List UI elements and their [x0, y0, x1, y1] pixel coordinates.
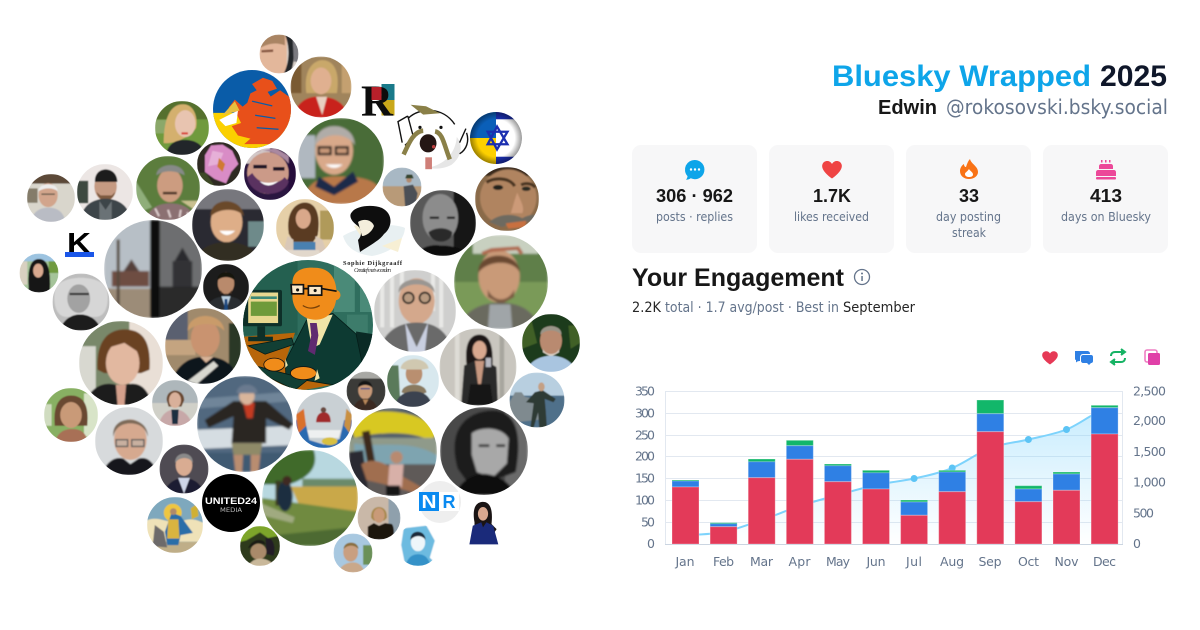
- month labels: May: [826, 554, 851, 569]
- avatar: United24 Media logo: [202, 474, 260, 532]
- avatar: man under blue sky: [334, 534, 372, 572]
- avatar: NR logo: N: [422, 492, 436, 512]
- right axis labels: [1133, 384, 1166, 551]
- avatar: smiling woman in red: [290, 56, 352, 118]
- avatar: man among green leaves: [240, 526, 280, 566]
- avatar: cap man: [136, 156, 200, 220]
- avatar: knight with wolf: [147, 497, 203, 553]
- bar: March: [748, 459, 775, 544]
- avatar: painted historic portrait: [475, 167, 539, 231]
- line markers: [872, 426, 1070, 488]
- avatar: woman in pink coat: [152, 380, 198, 426]
- left axis labels: 300: [635, 406, 655, 420]
- right axis labels: 1,000: [1133, 474, 1166, 490]
- logo: R with color blocks: R: [361, 76, 394, 126]
- month labels: Feb: [713, 554, 734, 569]
- icon: heart: [822, 161, 842, 178]
- bar: December: [1091, 405, 1118, 544]
- chart legend: [1042, 349, 1160, 365]
- bar: January: [672, 480, 699, 544]
- avatar: old man with books: [27, 174, 75, 222]
- avatar: fisheye rafting: [296, 392, 352, 448]
- avatar: United24 Media logo: MEDIA: [220, 506, 243, 514]
- left axis labels: 350: [635, 384, 655, 398]
- avatar: woman in black top: [358, 496, 400, 540]
- avatar: Sophie Dijkgraaff logo: Creatief met woorden: [354, 267, 391, 274]
- right axis labels: 1,500: [1133, 444, 1166, 459]
- panel: likes received: [769, 145, 894, 253]
- engagement summary: [632, 300, 915, 316]
- stat value: 306 · 962: [656, 186, 733, 206]
- icon: flame: [960, 159, 978, 179]
- icon: replies bubbles: [1075, 351, 1093, 365]
- stat label: [936, 209, 1001, 240]
- right axis labels: 2,500: [1133, 384, 1166, 398]
- avatar: woman in blue cut-out: [469, 502, 498, 544]
- right axis labels: 2,000: [1133, 413, 1166, 428]
- cumulative line: [686, 410, 1105, 535]
- avatar: Sophie Dijkgraaff logo: [343, 206, 405, 274]
- avatar: woman with dark hair: [20, 254, 58, 292]
- month labels: Aug: [940, 554, 964, 569]
- panel: posts and replies: [632, 145, 757, 253]
- month labels: Jul: [905, 554, 922, 569]
- avatar: man on dark green background: [522, 314, 580, 372]
- panel: day posting streak: [906, 145, 1031, 253]
- avatar: beanie man: [77, 164, 133, 220]
- heading: Your Engagement: Your Engagement: [632, 264, 845, 292]
- month labels: Oct: [1018, 554, 1039, 569]
- stat label: streak: [952, 225, 987, 240]
- bar: August: [939, 470, 966, 544]
- avatar: cartoon dog with moustache: [398, 105, 468, 169]
- month labels: [674, 554, 1116, 569]
- bar: September: [977, 400, 1004, 544]
- avatar: bearded man purple light: [244, 148, 296, 200]
- title: Bluesky Wrapped: [832, 60, 1091, 93]
- avatar: person in a field: [262, 450, 358, 546]
- bar: June: [862, 470, 890, 544]
- bar: July: [901, 500, 928, 544]
- bar: November: [1053, 472, 1080, 544]
- bar: February: [710, 523, 737, 544]
- left axis labels: 50: [641, 514, 655, 530]
- avatar: woman with brown hair: [79, 321, 163, 405]
- month labels: Jan: [674, 554, 694, 569]
- bar: May: [824, 464, 851, 544]
- avatar: hiker in landscape: [382, 168, 422, 206]
- avatar: main cartoon profile picture: [243, 260, 373, 390]
- user handle: @rokosovski.bsky.social: [946, 95, 1168, 119]
- avatar: blue illustrated man: [400, 525, 436, 566]
- month labels: Mar: [750, 554, 774, 569]
- title: 2025: [1100, 60, 1167, 93]
- avatar: older man with round glasses: [374, 270, 456, 352]
- avatar: man with sunglasses on head: [454, 235, 548, 329]
- stat label: likes received: [794, 209, 869, 224]
- avatar: older woman black and white: [52, 274, 110, 330]
- bar: April: [786, 440, 813, 544]
- avatar: NR logo: [419, 481, 461, 523]
- icon: chat bubble: [685, 160, 704, 180]
- month labels: Nov: [1054, 554, 1079, 569]
- icon: quotes squares: [1145, 350, 1160, 365]
- logo: K: K: [67, 228, 91, 260]
- right axis labels: 500: [1133, 506, 1154, 520]
- month labels: Dec: [1093, 554, 1116, 569]
- left axis labels: 0: [647, 536, 655, 551]
- icon: reposts arrows: [1111, 349, 1125, 365]
- engagement summary: total · 1.7 avg/post · Best in: [665, 300, 839, 316]
- avatar: Ukraine Israel flag: [470, 112, 522, 164]
- avatar: soldier with helmet: [387, 355, 439, 407]
- avatar: smiling man with glasses: [298, 118, 384, 204]
- month labels: Sep: [978, 554, 1002, 569]
- cumulative area: [686, 410, 1105, 544]
- avatar: man with glasses grey background: [95, 407, 163, 475]
- left axis labels: 100: [635, 492, 655, 508]
- left axis labels: 200: [635, 448, 655, 464]
- avatar: man in front of a ship: [510, 372, 564, 428]
- stat value: 1.7K: [813, 186, 851, 206]
- avatar: yellow smoke protest: [349, 408, 437, 496]
- icon: likes heart: [1042, 351, 1058, 364]
- avatar: man in suit: [203, 264, 249, 310]
- avatar: woman among trees: [44, 388, 98, 442]
- avatar: black and white bald man: [410, 190, 476, 256]
- avatar: curly-haired woman: [276, 199, 334, 257]
- avatar: NR logo: R: [442, 492, 456, 512]
- avatar: blonde woman: [155, 101, 209, 155]
- bar: October: [1015, 486, 1042, 544]
- stat value: 413: [1090, 186, 1122, 206]
- avatar: woman in the water: [197, 376, 293, 472]
- stat label: day posting: [936, 209, 1001, 224]
- avatar: man in dark suit: [160, 444, 208, 494]
- icon: cake: [1096, 160, 1116, 180]
- avatar: Sophie Dijkgraaff logo: Sophie Dijkgraaff: [343, 260, 403, 267]
- stat value: 33: [959, 186, 979, 206]
- avatar: pink flower: [197, 142, 241, 186]
- stat label: days on Bluesky: [1061, 209, 1152, 224]
- avatar: lion flag: [213, 70, 291, 148]
- engagement summary: 2.2K: [632, 300, 662, 316]
- bars: [672, 400, 1118, 544]
- avatar: black and white man with long hair: [440, 407, 528, 495]
- avatar: woman in black jacket: [440, 328, 516, 406]
- month labels: Apr: [788, 554, 811, 569]
- engagement summary: September: [843, 300, 915, 316]
- avatar: gate photos: [104, 220, 202, 318]
- avatar cluster: [20, 34, 580, 572]
- stat label: posts · replies: [656, 209, 733, 224]
- month labels: Jun: [866, 554, 886, 569]
- engagement chart: [635, 384, 1166, 569]
- right axis labels: 0: [1133, 536, 1141, 551]
- left axis labels: 250: [635, 428, 655, 442]
- grid lines: [665, 391, 1123, 544]
- panel: days on Bluesky: [1043, 145, 1168, 253]
- icon: info: [854, 270, 870, 284]
- left axis labels: [635, 384, 655, 551]
- avatar: young smiling man: [192, 189, 264, 261]
- avatar: man in a car: [346, 372, 386, 410]
- left axis labels: 150: [635, 470, 655, 486]
- avatar: woman with short blonde hair: [165, 308, 241, 384]
- avatar: United24 Media logo: UNITED24: [205, 496, 257, 506]
- avatar: headphones woman: [260, 34, 298, 74]
- user handle: Edwin: [878, 97, 937, 119]
